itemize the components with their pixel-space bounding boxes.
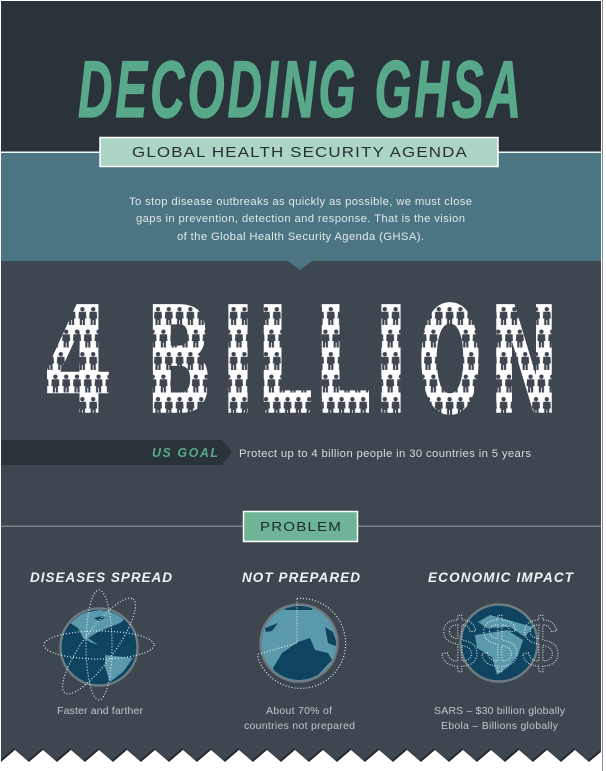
subtitle banner: GLOBAL HEALTH SECURITY AGENDA <box>132 145 468 161</box>
panel: diseases spread <box>30 570 172 717</box>
icon: globe with dollar signs: $ <box>481 604 518 682</box>
heading: DISEASES SPREAD <box>30 570 172 585</box>
US goal arrow <box>1 440 232 465</box>
caption: SARS – $30 billion globally <box>434 705 566 717</box>
caption: About 70% of <box>266 705 332 717</box>
torn zigzag bottom edge <box>0 750 601 771</box>
subtitle banner <box>100 138 498 166</box>
icon: globe with dollar signs: $ <box>441 604 478 682</box>
icon: globe with dollar signs <box>441 604 559 682</box>
header band <box>1 1 601 152</box>
problem divider <box>1 526 601 527</box>
right page edge <box>602 0 603 771</box>
problem label: PROBLEM <box>260 519 342 534</box>
goal text: Protect up to 4 billion people in 30 countries in 5 years <box>239 448 531 460</box>
intro text: To stop disease outbreaks as quickly as possible, we must close <box>129 196 472 208</box>
intro text <box>129 196 472 243</box>
heading: NOT PREPARED <box>242 570 360 585</box>
icon: globe with orbits <box>44 590 154 702</box>
caption <box>244 705 355 732</box>
problem label <box>244 512 358 542</box>
panel: economic impact <box>428 570 575 732</box>
caption: countries not prepared <box>244 720 355 732</box>
intro band <box>1 152 601 270</box>
intro text: gaps in prevention, detection and response. That is the vision <box>136 213 465 225</box>
icon: globe with 70 percent arc <box>257 598 346 690</box>
caption: Ebola – Billions globally <box>441 720 559 732</box>
US goal arrow: US GOAL <box>152 446 218 460</box>
big number: 4 BILLION, people pattern showing through the letters <box>47 302 552 415</box>
intro text: of the Global Health Security Agenda (GHSA). <box>177 231 424 243</box>
icon: globe with dollar signs: $ <box>522 604 559 682</box>
panel: not prepared <box>242 570 360 732</box>
heading: ECONOMIC IMPACT <box>428 570 575 585</box>
caption <box>434 705 566 732</box>
caption: Faster and farther <box>57 705 144 717</box>
